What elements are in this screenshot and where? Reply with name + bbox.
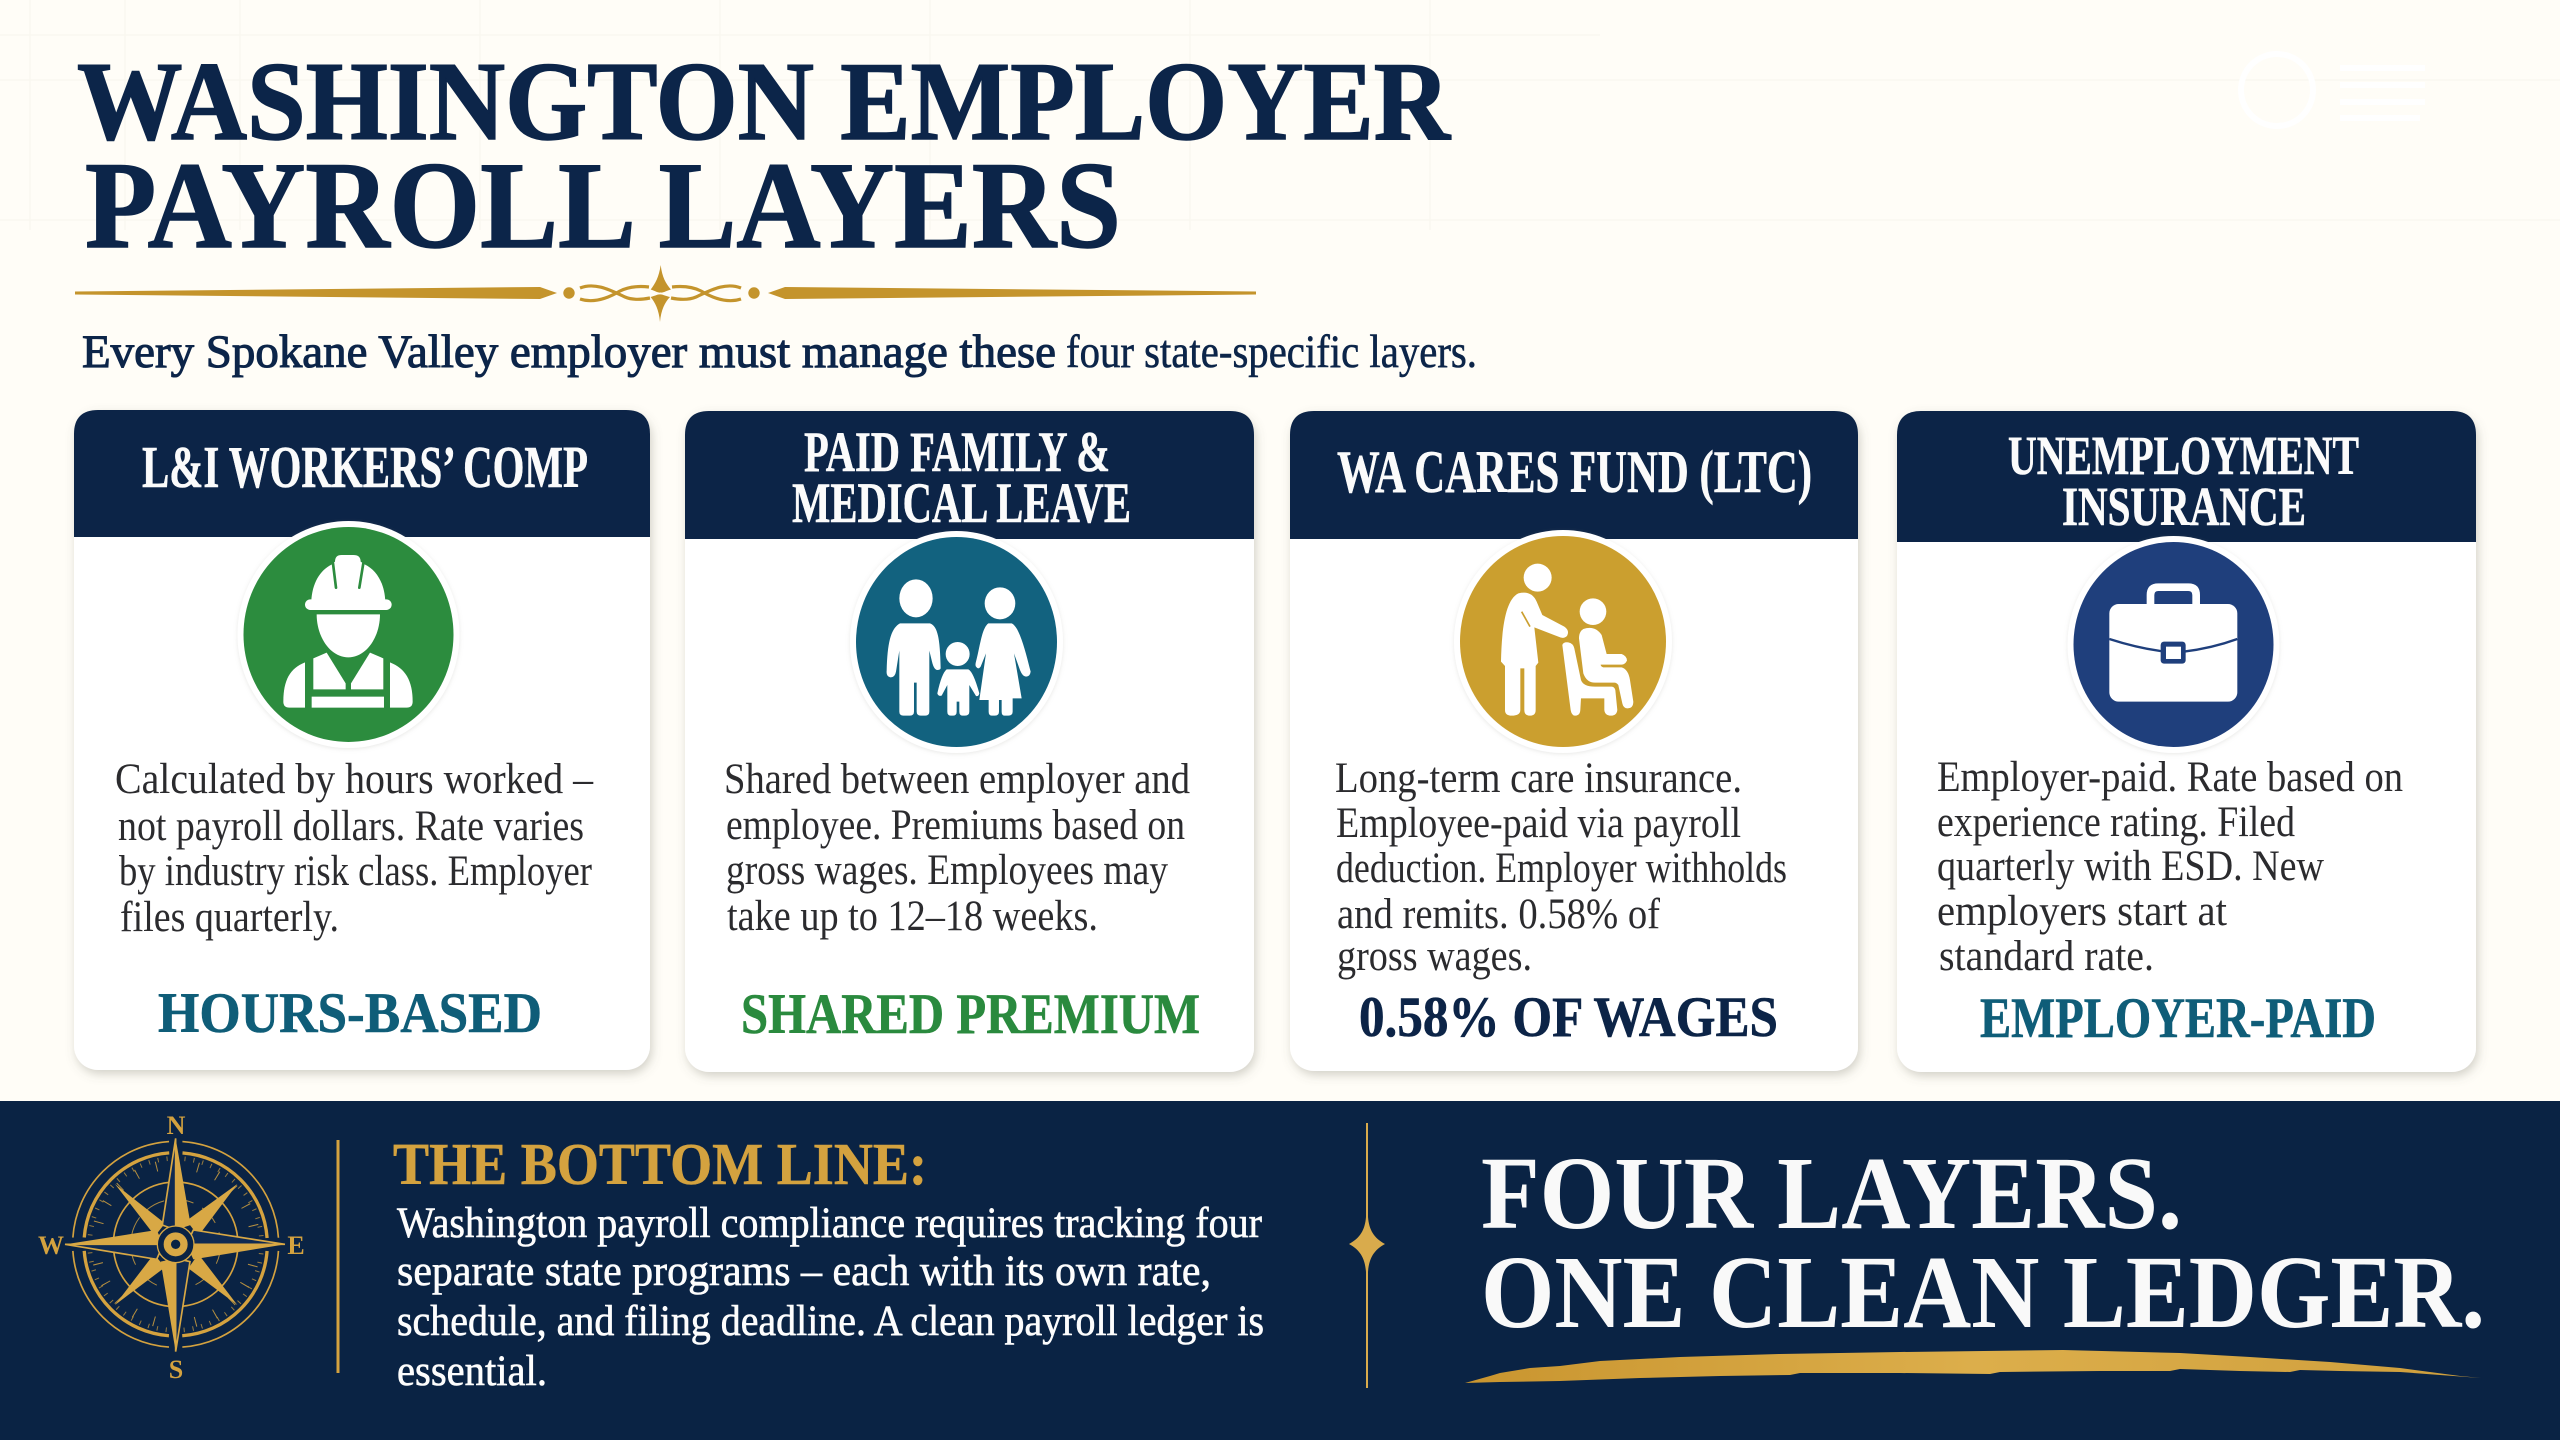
title: WASHINGTON EMPLOYER bbox=[77, 40, 1451, 164]
panel: Paid Family & Medical Leave bbox=[685, 411, 1254, 1072]
description: files quarterly. bbox=[120, 894, 339, 941]
description bbox=[1937, 754, 2403, 980]
subtitle: Every Spokane Valley employer must manage these bbox=[82, 326, 1056, 378]
card header bbox=[74, 410, 650, 537]
tag: hours-based: HOURS-BASED bbox=[158, 982, 542, 1045]
slogan: FOUR LAYERS. bbox=[1481, 1136, 2182, 1251]
description: Long-term care insurance. bbox=[1335, 755, 1742, 802]
heading: WA CARES FUND (LTC) bbox=[1337, 439, 1812, 505]
description: Employee-paid via payroll bbox=[1336, 800, 1741, 847]
description: not payroll dollars. Rate varies bbox=[118, 803, 584, 850]
description bbox=[115, 756, 593, 941]
heading: MEDICAL LEAVE bbox=[792, 472, 1131, 535]
card background bbox=[685, 411, 1254, 1072]
heading: INSURANCE bbox=[2062, 476, 2306, 537]
slogan bbox=[1481, 1136, 2485, 1350]
tag: shared premium: SHARED PREMIUM bbox=[741, 983, 1200, 1046]
bottom line heading: THE BOTTOM LINE: bbox=[393, 1131, 927, 1197]
bottom line text bbox=[397, 1200, 1264, 1395]
description: take up to 12–18 weeks. bbox=[727, 893, 1098, 940]
heading: L&I WORKERS’ COMP bbox=[142, 434, 588, 500]
card background bbox=[74, 410, 650, 1070]
icon: gold compass rose: E bbox=[287, 1231, 305, 1260]
panel: Unemployment Insurance bbox=[1897, 411, 2476, 1072]
description: employee. Premiums based on bbox=[726, 802, 1185, 849]
description: gross wages. bbox=[1337, 933, 1532, 980]
gold brush stroke bbox=[1465, 1350, 2481, 1383]
icon: gold compass rose bbox=[38, 1111, 305, 1384]
icon: briefcase bbox=[2068, 536, 2280, 753]
description bbox=[1335, 755, 1787, 980]
card header bbox=[685, 411, 1254, 539]
description: experience rating. Filed bbox=[1937, 799, 2295, 846]
divider line bbox=[336, 1140, 340, 1373]
description: gross wages. Employees may bbox=[726, 847, 1168, 894]
heading bbox=[792, 421, 1131, 535]
tag: 0.58% of wages: 0.58% OF WAGES bbox=[1359, 986, 1778, 1049]
heading: PAID FAMILY & bbox=[804, 421, 1110, 484]
heading bbox=[2008, 425, 2359, 537]
slogan: ONE CLEAN LEDGER. bbox=[1481, 1235, 2485, 1350]
tag: employer-paid: EMPLOYER-PAID bbox=[1980, 987, 2376, 1050]
description: Shared between employer and bbox=[724, 756, 1190, 803]
gold star divider bbox=[1349, 1123, 1385, 1388]
title: PAYROLL LAYERS bbox=[85, 137, 1121, 274]
description: deduction. Employer withholds bbox=[1336, 845, 1787, 892]
card header bbox=[1290, 411, 1858, 539]
heading: UNEMPLOYMENT bbox=[2008, 425, 2359, 486]
description bbox=[724, 756, 1190, 940]
card header bbox=[1897, 411, 2476, 542]
description: quarterly with ESD. New bbox=[1937, 843, 2324, 890]
description: Employer-paid. Rate based on bbox=[1937, 754, 2403, 801]
icon: construction worker bbox=[238, 521, 460, 748]
icon: gold compass rose: N bbox=[167, 1111, 186, 1140]
description: and remits. 0.58% of bbox=[1337, 891, 1661, 938]
banner background bbox=[0, 1101, 2560, 1440]
card background bbox=[1290, 411, 1858, 1071]
card background bbox=[1897, 411, 2476, 1072]
icon: gold compass rose: S bbox=[169, 1355, 183, 1384]
panel: bottom banner bbox=[0, 1101, 2560, 1440]
description: by industry risk class. Employer bbox=[119, 848, 592, 895]
icon: family bbox=[850, 531, 1063, 753]
description: Calculated by hours worked – bbox=[115, 756, 593, 803]
panel: WA Cares Fund bbox=[1290, 411, 1858, 1071]
icon: gold compass rose: W bbox=[38, 1231, 64, 1260]
icon: caregiver and seated person bbox=[1454, 530, 1672, 753]
subtitle bbox=[82, 326, 1477, 378]
title bbox=[77, 40, 1451, 274]
description: employers start at bbox=[1937, 888, 2227, 935]
bottom line text: schedule, and filing deadline. A clean payroll ledger is bbox=[397, 1298, 1264, 1345]
bottom line text: separate state programs – each with its own rate, bbox=[397, 1248, 1211, 1295]
panel: L&I Workers' Comp bbox=[74, 410, 650, 1070]
subtitle: four state-specific layers. bbox=[1066, 326, 1477, 378]
bottom line text: essential. bbox=[397, 1348, 547, 1395]
bottom line text: Washington payroll compliance requires tracking four bbox=[397, 1200, 1262, 1247]
description: standard rate. bbox=[1939, 933, 2154, 980]
ornamental gold divider bbox=[75, 265, 1256, 322]
